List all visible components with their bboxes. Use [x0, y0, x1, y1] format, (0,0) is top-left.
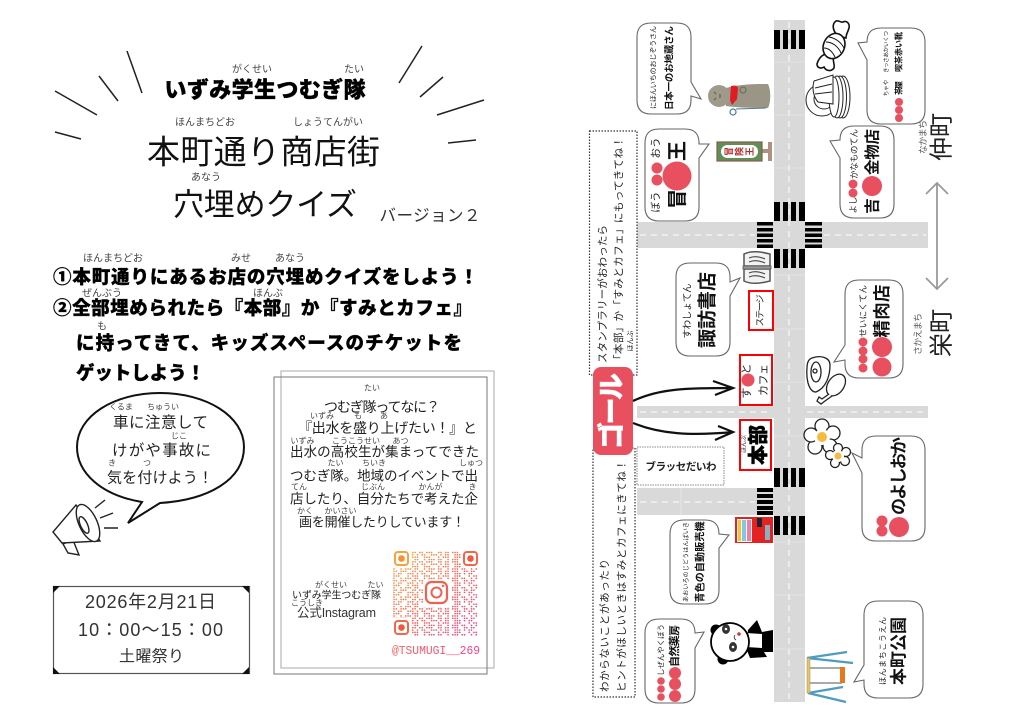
team name: [164, 62, 366, 102]
bubble: jizo: にほんいちのおじぞうさん: [650, 26, 658, 109]
bubble: noyoshioka: のよしおか: [890, 437, 908, 515]
dotted note: stamp rally goal: ほんぶ: [626, 330, 634, 352]
dotted note: stamp rally goal: [590, 131, 637, 375]
speech bubble: safety note: じこ: [171, 432, 187, 440]
team name: いずみ学生つむぎ隊: [164, 78, 366, 102]
dotted note: hint: わからないことがあったり: [598, 559, 611, 692]
bubble: kanamono: 吉: [864, 198, 882, 214]
instructions: ほんぶ: [253, 288, 283, 300]
icon: candy: [817, 21, 849, 71]
bubble: honmachi park: [854, 601, 923, 698]
bubble: shizen pharmacy: しぜんやくぼう: [656, 624, 666, 676]
label: sakaemachi: [913, 309, 956, 357]
speech bubble: safety note: [77, 393, 244, 523]
goal sign: [593, 367, 633, 455]
bubble: suwa bookstore: すわしょてん: [682, 284, 694, 338]
panel: about tsumugi team: たい: [328, 458, 344, 468]
goal sign: ゴール: [596, 373, 627, 449]
team name: たい: [344, 64, 364, 76]
icon: tea cup and saucer: [806, 75, 850, 118]
instructions: あなう: [275, 252, 305, 264]
instagram label: 公式Instagram: [297, 606, 376, 620]
bubble: meat shop: せいにくてん: [858, 285, 868, 337]
icon: jizo statue: [708, 84, 770, 115]
bubble: jizo: 日本一のお地蔵さん: [664, 26, 676, 110]
direction arrow: [926, 183, 948, 289]
main title line 2: あなう: [191, 172, 221, 184]
icon: vending machine: [735, 517, 773, 543]
instructions: ほんまちどお: [83, 252, 143, 264]
date box: [53, 586, 250, 674]
panel: about tsumugi team: かんが: [418, 482, 442, 492]
instagram handle: @TSUMUGI__269: [392, 644, 480, 658]
instagram label: [291, 580, 384, 620]
dotted note: hint: [593, 448, 635, 697]
dotted note: stamp rally goal: スタンプラリーがおわったら: [596, 225, 609, 363]
bubble: boken-o quiz: おう: [650, 138, 662, 158]
bubble: kanamono: [830, 126, 894, 218]
icon: signboard: 冒: [724, 147, 734, 156]
label: nakamachi: なかまち: [918, 120, 928, 154]
panel: about tsumugi team: き: [468, 482, 476, 492]
bubble: cafe akai kutsu: [858, 28, 925, 124]
bubble: vending machine: あおいろのじどうはんばいき: [682, 522, 690, 602]
place: plasse daiwa: [637, 447, 724, 485]
bubble: boken-o quiz: 冒: [667, 189, 689, 209]
main title line 1: ほんまちどお: [175, 116, 235, 128]
bubble: cafe akai kutsu: 喫茶赤い靴: [894, 32, 904, 72]
icon: flowers: [804, 419, 850, 468]
date box: 10：00〜15：00: [78, 620, 223, 640]
box: sumito cafe: す: [740, 388, 753, 398]
label: sakaemachi: 栄町: [928, 309, 956, 357]
box: honbu: 本部: [747, 425, 770, 465]
main title line 2: 穴埋めクイズ: [173, 188, 357, 222]
panel: about tsumugi team: あつ: [392, 436, 408, 446]
QR code: [393, 550, 479, 636]
bubble: vending machine: [670, 520, 729, 604]
panel: about tsumugi team: 『出水を盛り上げたい！』と: [298, 420, 477, 436]
panel: about tsumugi team: 画を開催したりしています！: [299, 514, 465, 530]
panel: about tsumugi team: かく: [297, 506, 313, 516]
main title line 1: しょうてんがい: [293, 116, 363, 128]
speech bubble: safety note: ちゅうい: [147, 402, 179, 412]
speech bubble: safety note: けがや事故に: [112, 442, 211, 460]
instructions: ゲットしよう！: [76, 362, 205, 384]
icon: meat and drumstick: [807, 357, 849, 404]
bubble: jizo: [637, 23, 701, 114]
speech bubble: safety note: 車に注意して: [113, 414, 208, 432]
main title line 2: [173, 172, 357, 222]
bubble: honmachi park: 本町公園: [890, 617, 908, 685]
main title line 1: 本町通り商店街: [147, 134, 380, 170]
panel: about tsumugi team: あ: [380, 412, 388, 420]
crosswalks: [757, 30, 822, 535]
speech bubble: safety note: き: [108, 458, 116, 468]
date box: 土曜祭り: [119, 648, 184, 666]
dotted note: hint: ヒントがほしいときはすみとカフェにきてね！: [615, 460, 628, 692]
map: roads: [637, 20, 928, 702]
panel: about tsumugi team: いずみ: [290, 436, 314, 446]
label: sakaemachi: さかえまち: [913, 313, 923, 355]
bubble: meat shop: [834, 280, 903, 378]
speech bubble: safety note: 気を付けよう！: [107, 470, 213, 486]
box: stage: ステージ: [755, 294, 765, 326]
panel: about tsumugi team: いずみ: [310, 410, 334, 420]
bubble: cafe akai kutsu: ちゃや: [882, 80, 890, 96]
box: honbu: [740, 420, 771, 470]
bubble: cafe akai kutsu: 茶屋: [894, 81, 904, 95]
instagram label: がくせい: [315, 580, 347, 590]
speech bubble: safety note: つ: [143, 458, 151, 468]
bubble: suwa bookstore: 諏訪書店: [696, 272, 718, 348]
bubble: boken-o quiz: ぼう: [650, 192, 662, 212]
panel: about tsumugi team: ちいき: [362, 458, 386, 468]
bubble: kanamono: 金物店: [862, 129, 882, 175]
box: sumito cafe: と: [740, 364, 753, 374]
icon: swing: [807, 652, 853, 702]
team name: がくせい: [232, 62, 272, 76]
icon: panda: [710, 620, 773, 664]
bubble: suwa bookstore: [676, 263, 740, 356]
box: honbu: ほんぶ: [741, 435, 748, 453]
bubble: honmachi park: ほんまちこうえん: [878, 617, 888, 685]
bubble: boken-o quiz: [645, 129, 709, 221]
bubble: shizen pharmacy: 自然薬房: [667, 625, 681, 667]
bubble: kanamono: かなものてん: [849, 129, 859, 179]
speech bubble: safety note: くるま: [109, 402, 133, 412]
icon: signboard: 王: [745, 147, 755, 156]
panel: about tsumugi team: じぶん: [361, 482, 385, 492]
icon: signboard: [717, 142, 772, 161]
panel: about tsumugi team: も: [354, 412, 362, 420]
instagram label: たい: [368, 580, 384, 590]
instructions: に持ってきて、キッズスペースのチケットを: [76, 332, 462, 354]
icon: megaphone: [53, 500, 118, 555]
instagram label: いずみ学生つむぎ隊: [292, 588, 381, 602]
box: stage: [749, 291, 773, 330]
icon: open book: [743, 252, 771, 283]
icon: signboard: 険: [734, 147, 744, 156]
place: plasse daiwa: ブラッセだいわ: [646, 460, 716, 473]
bubble: shizen pharmacy: [645, 619, 704, 703]
dotted note: stamp rally goal: 「本部」か「すみとカフェ」にもってきてね！: [612, 137, 625, 365]
panel: about tsumugi team: たい: [364, 384, 380, 392]
label: nakamachi: 仲町: [928, 113, 956, 161]
panel: about tsumugi team: 店したり、自分たちで考えた企: [290, 492, 478, 506]
panel: about tsumugi team: かいさい: [324, 506, 356, 516]
panel: about tsumugi team: つむぎ隊ってなに？: [324, 399, 440, 415]
version label: バージョン２: [380, 207, 480, 225]
main title line 1: [147, 116, 380, 170]
panel: about tsumugi team: てん: [291, 482, 307, 492]
bubble: boken-o quiz: 王: [667, 141, 689, 161]
panel: about tsumugi team: こうこうせい: [332, 436, 380, 446]
date box: 2026年2月21日: [85, 592, 216, 612]
bubble: kanamono: よし: [848, 196, 858, 214]
box: sumito cafe: カフェ: [757, 364, 770, 396]
decorative rays around title: [55, 46, 484, 143]
instagram label: こうしき: [291, 598, 323, 608]
arrows from goal: [633, 381, 733, 440]
instructions: ②全部埋められたら『本部』か『すみとカフェ』: [53, 298, 472, 318]
bubble: meat shop: 精肉店: [872, 284, 892, 338]
bubble: noyoshioka: [852, 436, 925, 541]
panel: about tsumugi team: つむぎ隊。地域のイベントで出: [290, 468, 478, 484]
instructions: みせ: [231, 252, 251, 264]
bubble: vending machine: 青色の自動販売機: [694, 522, 706, 602]
panel: about tsumugi team: 出水の高校生が集まってできた: [290, 444, 479, 460]
panel: about tsumugi team: [274, 371, 494, 674]
bubble: cafe akai kutsu: きっさあかいくつ: [883, 31, 890, 73]
title block: [147, 62, 480, 225]
panel: about tsumugi team: しゅつ: [459, 458, 483, 468]
instructions: ぜんぶう: [82, 288, 122, 300]
instructions: [53, 252, 478, 384]
box: sumito cafe: [740, 355, 772, 405]
instructions: も: [97, 320, 107, 332]
instructions: ①本町通りにあるお店の穴埋めクイズをしよう！: [53, 266, 478, 288]
